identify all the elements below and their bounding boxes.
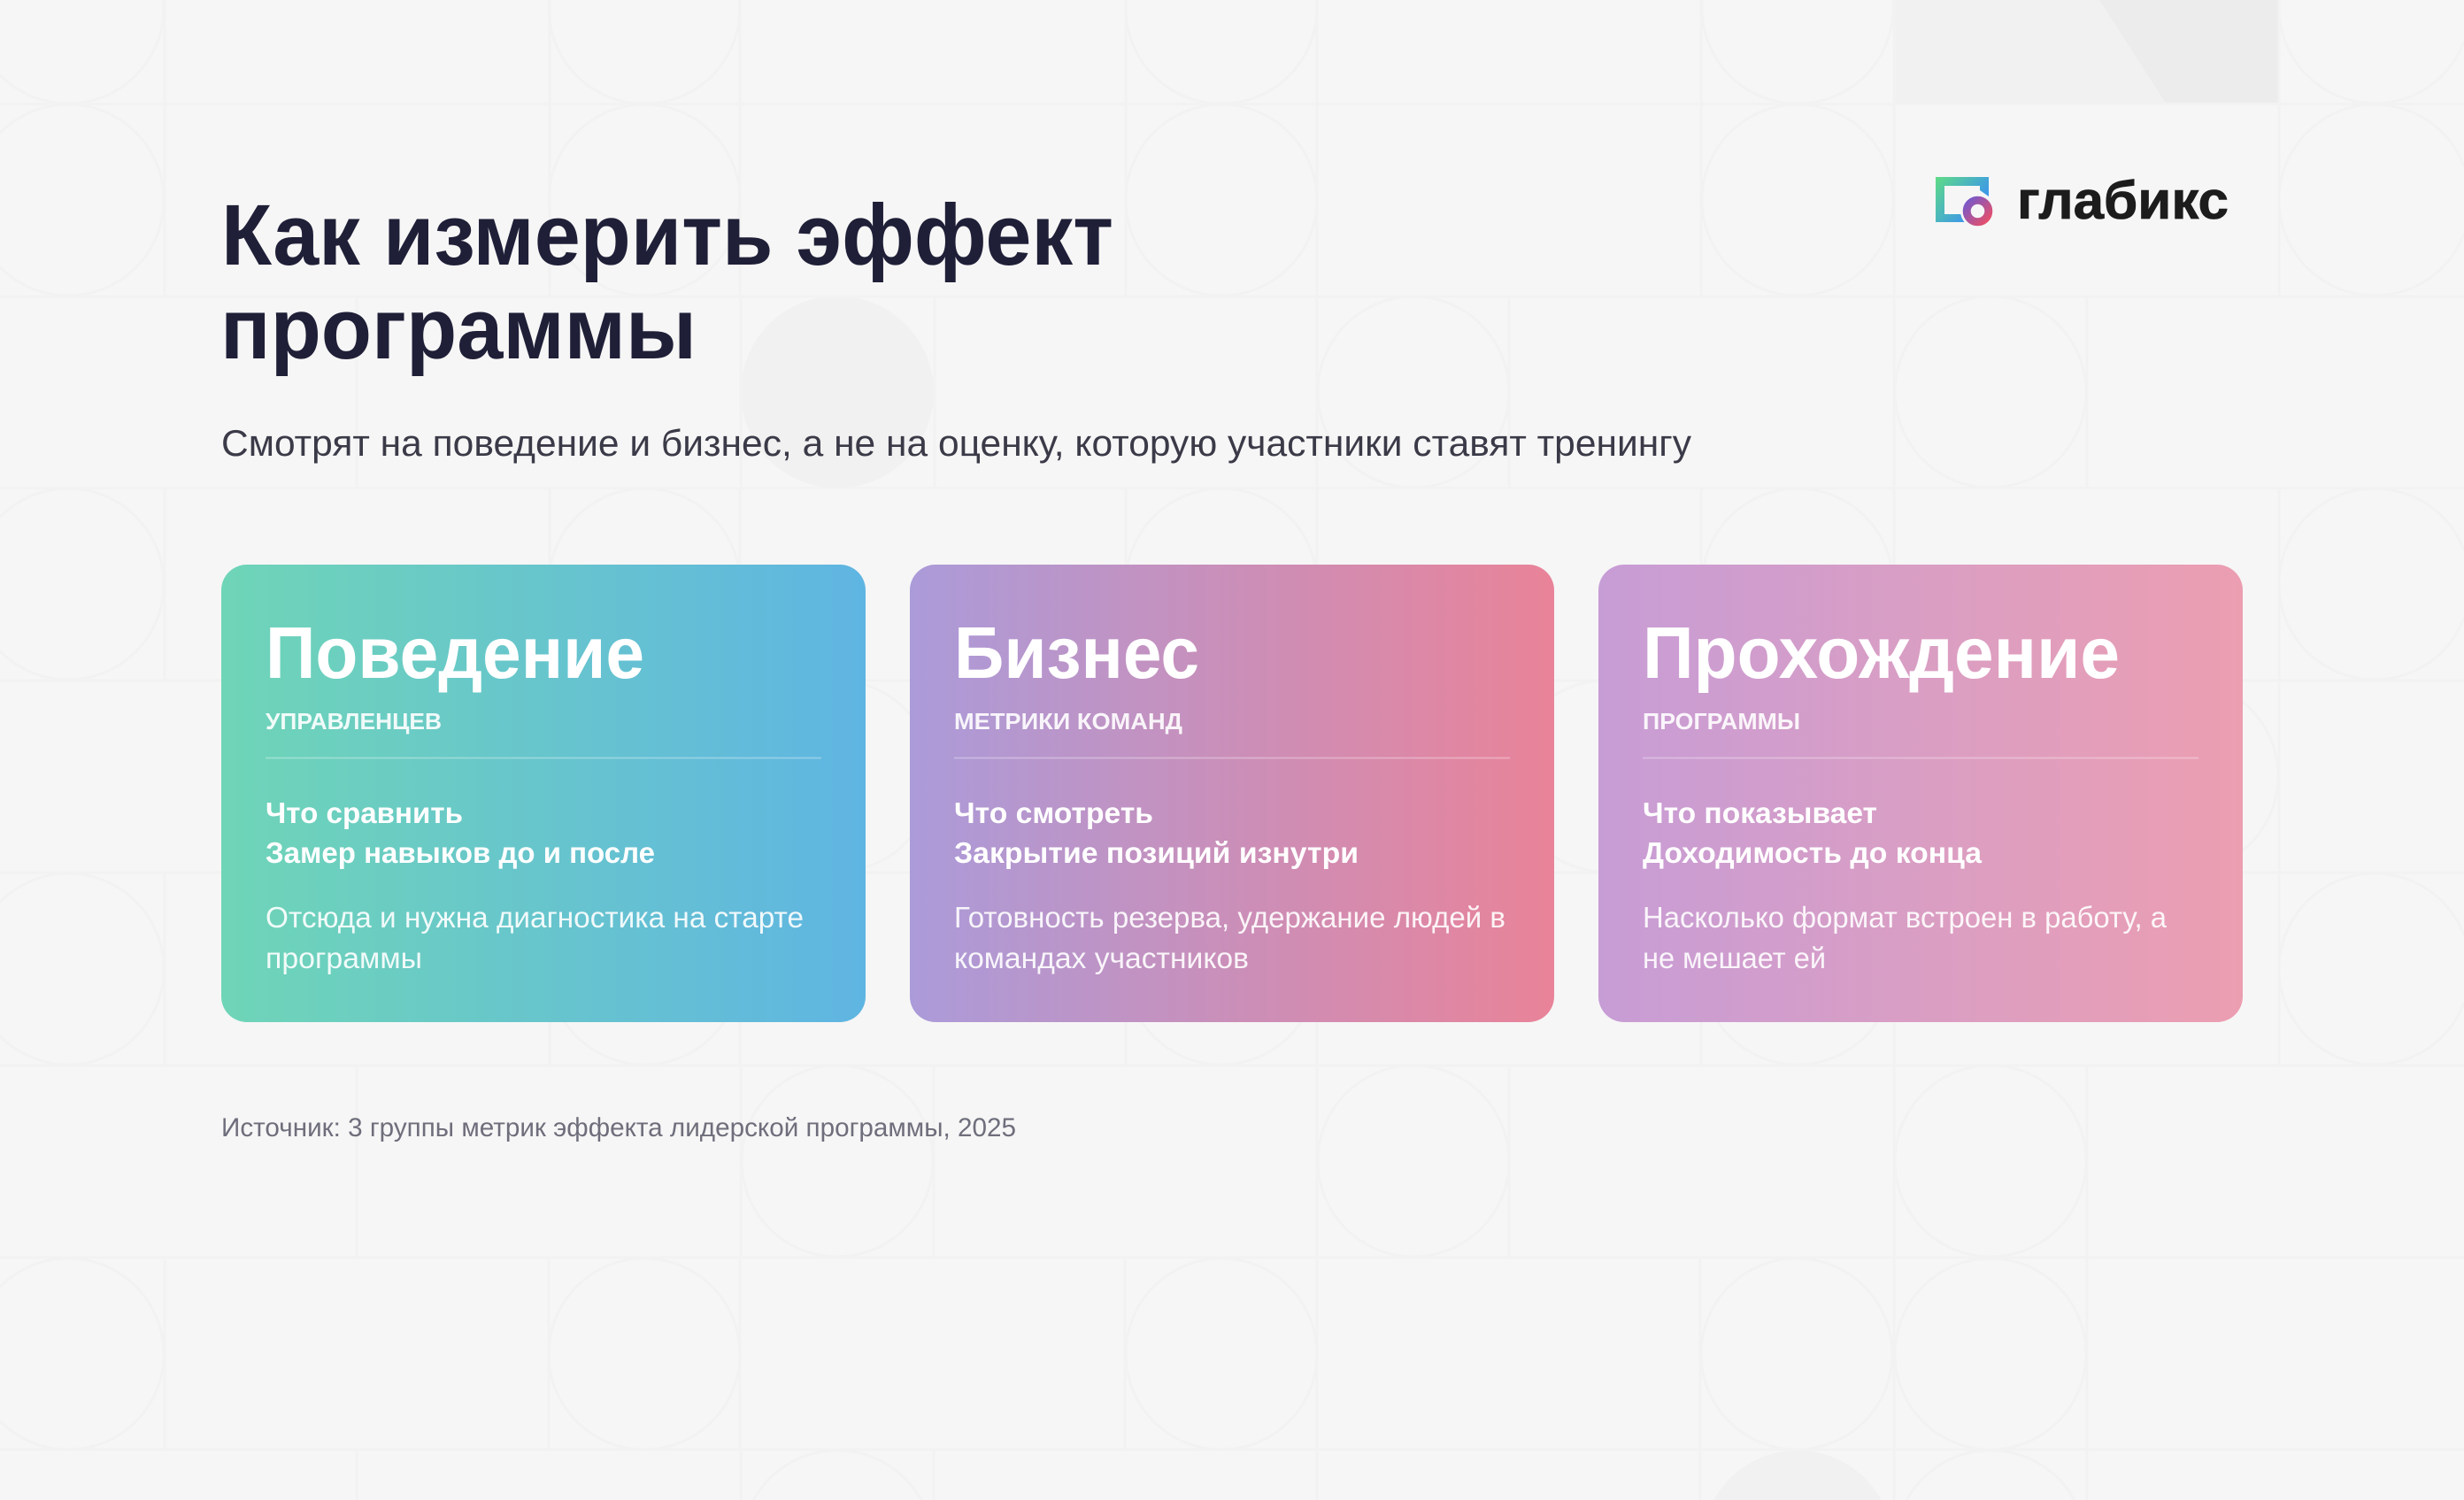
card background [1598, 565, 2243, 1022]
card subheading: ПРОГРАММЫ [1643, 708, 1800, 735]
subtitle: Смотрят на поведение и бизнес, а не на оценку, которую участники ставят тренингу [221, 422, 1691, 464]
card heading: Бизнес [954, 612, 1199, 694]
card description: Отсюда и нужна диагностика на старте [266, 901, 804, 934]
card description: Насколько формат встроен в работу, а [1643, 901, 2168, 934]
card key text: Что сравнить [266, 796, 463, 829]
card description: Готовность резерва, удержание людей в [954, 901, 1505, 934]
card heading: Прохождение [1643, 612, 2120, 694]
panel: бизнес [910, 565, 1554, 1022]
card description: командах участников [954, 942, 1249, 974]
card description: программы [266, 942, 422, 974]
card background [221, 565, 866, 1022]
title [220, 187, 1113, 377]
card key text: Доходимость до конца [1643, 836, 1983, 869]
panel: поведение [221, 565, 866, 1022]
panel: прохождение [1598, 565, 2243, 1022]
source note: Источник: 3 группы метрик эффекта лидерской программы, 2025 [221, 1113, 1016, 1142]
logo wordmark: глабикс [2017, 171, 2229, 230]
card heading: Поведение [266, 612, 644, 694]
card key text: Замер навыков до и после [266, 836, 655, 869]
card subheading: УПРАВЛЕНЦЕВ [266, 708, 442, 735]
card key text: Закрытие позиций изнутри [954, 836, 1359, 869]
card key text: Что показывает [1643, 796, 1877, 829]
card description [1643, 901, 2168, 974]
card description [266, 901, 804, 974]
title: программы [220, 281, 697, 377]
card key text [266, 796, 655, 869]
logo: глабикс [1936, 171, 2229, 230]
icon: logo mark [1936, 177, 1995, 228]
card background [910, 565, 1554, 1022]
card key text: Что смотреть [954, 796, 1153, 829]
card subheading: МЕТРИКИ КОМАНД [954, 708, 1182, 735]
card key text [1643, 796, 1983, 869]
card key text [954, 796, 1359, 869]
title: Как измерить эффект [221, 187, 1113, 283]
card description: не мешает ей [1643, 942, 1826, 974]
card description [954, 901, 1505, 974]
